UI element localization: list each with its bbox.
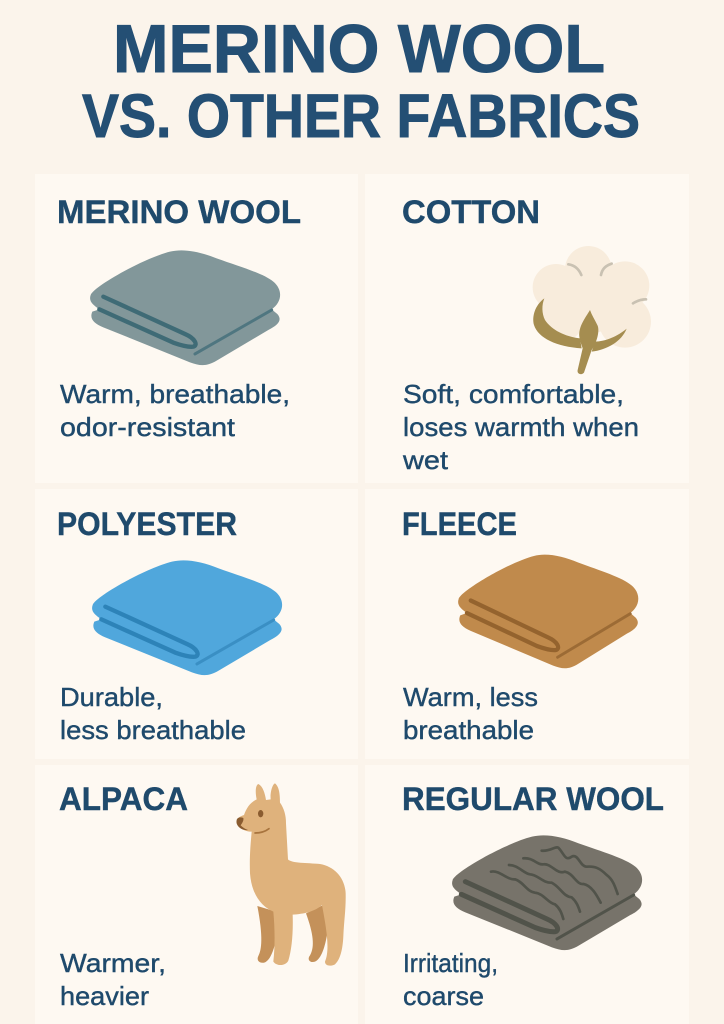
description: polyester: Durable, <box>60 682 163 712</box>
description: cotton <box>402 379 639 475</box>
title <box>82 11 640 150</box>
panel: merino wool <box>35 174 358 483</box>
description: merino wool <box>60 379 290 442</box>
panel: regular wool <box>365 765 689 1024</box>
panel: alpaca <box>35 765 358 1024</box>
icon: folded coarse grey blanket <box>452 835 642 950</box>
icon: folded blue blanket <box>92 560 282 675</box>
title: MERINO WOOL <box>113 11 605 87</box>
description: polyester: less breathable <box>60 715 246 745</box>
icon: alpaca <box>236 783 346 966</box>
panel: cotton <box>365 174 689 483</box>
description: alpaca: Warmer, <box>60 948 166 978</box>
panel: fleece <box>365 489 689 759</box>
heading: polyester: POLYESTER <box>57 506 237 542</box>
heading: merino wool: MERINO WOOL <box>57 194 301 230</box>
description: fleece: Warm, less <box>403 682 538 712</box>
description: fleece: breathable <box>403 715 534 745</box>
description: merino wool: odor-resistant <box>60 412 236 442</box>
heading: fleece: FLEECE <box>402 506 517 542</box>
icon: folded brown blanket <box>458 555 638 668</box>
description: cotton: wet <box>402 445 449 475</box>
description: polyester <box>60 682 246 745</box>
description: regular wool: Irritating, <box>403 948 498 978</box>
description: regular wool <box>403 948 498 1011</box>
description: cotton: loses warmth when <box>403 412 639 442</box>
description: cotton: Soft, comfortable, <box>403 379 624 409</box>
description: merino wool: Warm, breathable, <box>60 379 290 409</box>
title: VS. OTHER FABRICS <box>82 82 640 150</box>
description: regular wool: coarse <box>403 981 484 1011</box>
panel: polyester <box>35 489 358 759</box>
heading: regular wool: REGULAR WOOL <box>402 781 664 817</box>
icon: cotton boll <box>533 246 651 374</box>
heading: cotton: COTTON <box>402 194 540 230</box>
description: fleece <box>403 682 538 745</box>
icon: folded grey-blue blanket <box>90 250 280 365</box>
description: alpaca <box>60 948 166 1011</box>
heading: alpaca: ALPACA <box>59 781 188 817</box>
description: alpaca: heavier <box>60 981 149 1011</box>
